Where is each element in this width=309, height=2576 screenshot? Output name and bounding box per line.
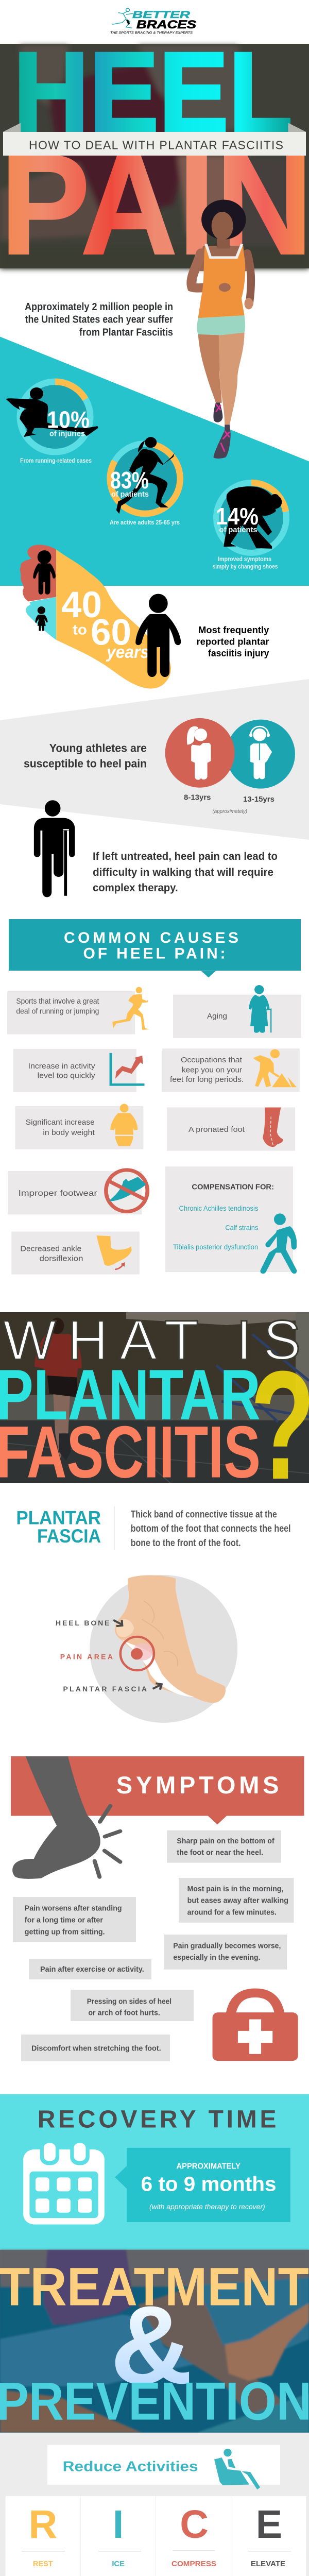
hero photo background: [0, 44, 309, 269]
panel: hero heel pain: [0, 29, 309, 284]
cause: body weight: [15, 1104, 143, 1149]
cause: pronated foot: [167, 1107, 295, 1151]
text: if left untreated: complex therapy.: [93, 882, 178, 894]
logo: Better Braces top: [110, 8, 196, 35]
heading: common causes banner: OF HEEL PAIN:: [83, 945, 226, 962]
panel: plantar fascia definition: [16, 1506, 290, 1550]
callout: 6 to 9 months: [115, 2148, 290, 2222]
panel: what is plantar fasciitis: [0, 1309, 309, 1512]
symptom: worsens after standing: Pain worsens after standing: [25, 1904, 122, 1913]
stat: 14% of patients: of patients: [219, 526, 258, 534]
stat: 14% of patients: simply by changing shoes: [212, 563, 278, 570]
label: heel bone: HEEL BONE: [56, 1619, 109, 1627]
panel: causes grid: [7, 985, 301, 1275]
callout: 6 to 9 months: (with appropriate therapy to recover): [149, 2202, 265, 2211]
symptom: worsens after standing: for a long time or after: [25, 1916, 103, 1924]
panel: treatment and prevention: [0, 2250, 309, 2433]
age numbers: [61, 585, 149, 662]
label: pain area: PAIN AREA: [60, 1653, 113, 1661]
icon: adult figure: [135, 594, 181, 677]
ice: I: [113, 2502, 124, 2547]
cause: occupations: keep you on your: [182, 1065, 242, 1075]
symptom: gradually worse: [164, 1935, 287, 1970]
stat: 83% of patients: [102, 436, 188, 526]
intro text: 2 million people: the United States each year suffer: [25, 314, 173, 326]
icon: boy circle: [226, 720, 295, 789]
age numbers: 60: [91, 612, 131, 653]
cause: activity increase: Increase in activity: [28, 1062, 95, 1071]
symptom: after exercise: [29, 1959, 151, 1979]
stat: 14% of patients: 14%: [216, 503, 259, 530]
text: young athletes: susceptible to heel pain: [24, 757, 147, 770]
icon: first aid kit: [213, 1993, 298, 2061]
symptom: discomfort stretching: [21, 2035, 170, 2061]
heading: plantar fascia: FASCIA: [37, 1526, 101, 1547]
stat: 14% of patients: [212, 480, 289, 570]
intro text: 2 million people: [25, 301, 173, 338]
symptom: sharp pain: Sharp pain on the bottom of: [177, 1837, 275, 1845]
cause: activity increase: [13, 1049, 145, 1092]
heading: common causes banner: COMMON CAUSES: [64, 929, 238, 946]
cause: compensation: COMPENSATION FOR:: [192, 1183, 274, 1192]
stat: 10% of injuries: [6, 378, 98, 464]
age labels: 8-13yrs: [184, 793, 211, 802]
stat: 83% of patients: 83%: [110, 467, 149, 494]
logo: Better Braces top: BETTER: [132, 10, 190, 21]
caption: most frequently reported: reported plantar: [197, 637, 269, 647]
stat: 10% of injuries: of injuries: [49, 429, 85, 438]
age labels: (approximately): [212, 809, 247, 815]
symptom: worsens after standing: [13, 1897, 136, 1942]
icon: painful foot: [12, 1756, 120, 1879]
panel: recovery time: [0, 2094, 309, 2250]
cause: compensation: [165, 1166, 297, 1274]
cause: ankle dorsiflexion: [11, 1231, 140, 1275]
title: ampersand: &: [110, 2282, 193, 2407]
symptom: sharp pain: [167, 1831, 281, 1863]
symptom: pressing sides: [71, 1990, 194, 2021]
callout: 6 to 9 months: 6 to 9 months: [141, 2173, 276, 2195]
item: reduce activities: [47, 2445, 280, 2489]
symptom: morning pain: around for a few minutes.: [187, 1908, 277, 1917]
stat: 14% of patients: Improved symptoms: [218, 555, 271, 563]
item: reduce activities: Reduce Activities: [63, 2458, 198, 2474]
cause: compensation: Calf strains: [225, 1224, 258, 1232]
panel: young athletes: [0, 679, 309, 840]
stat: 10% of injuries: From running-related cases: [20, 457, 92, 464]
heading: plantar fascia: PLANTAR: [16, 1507, 101, 1529]
text: definition: Thick band of connective tissue at the: [131, 1509, 277, 1520]
cause: occupations: Occupations that: [181, 1056, 243, 1064]
cause: sports: Sports that involve a great: [16, 997, 99, 1006]
cause: aging: Aging: [207, 1012, 227, 1021]
cause: improper footwear: [8, 1170, 147, 1214]
title: what is: WHAT IS: [3, 1309, 301, 1371]
rest: [29, 2502, 57, 2568]
symptom: morning pain: [179, 1878, 294, 1923]
cause: improper footwear: Improper footwear: [19, 1189, 97, 1198]
logo: Better Braces top: THE SPORTS BRACING & THERAPY EXPERTS: [110, 31, 193, 35]
icon: foot with people: [20, 545, 171, 689]
subtitle ribbon: [3, 123, 306, 156]
cause: body weight: in body weight: [43, 1128, 95, 1137]
intro text: 2 million people: Approximately 2 million people in: [25, 301, 173, 313]
photo background: roller and leg: [0, 2250, 309, 2433]
symptom: discomfort stretching: Discomfort when stretching the foot.: [31, 2044, 161, 2053]
heading: plantar fascia: [16, 1507, 101, 1547]
icon: man with cane: [34, 800, 75, 897]
intro text: 2 million people: from Plantar Fasciitis: [79, 327, 173, 338]
runner woman photo illustration: [192, 200, 253, 459]
symptom: pressing sides: Pressing on sides of heel: [87, 1997, 171, 2006]
heading: common causes banner: [9, 919, 301, 977]
cause: sports: deal of running or jumping: [16, 1008, 99, 1016]
elevate: ELEVATE: [251, 2560, 285, 2568]
text: if left untreated: If left untreated, heel pain can lead to: [93, 851, 278, 862]
panel: treatment list background: [0, 2433, 309, 2576]
diagram: foot anatomy: [56, 1575, 237, 1723]
ice: [112, 2502, 125, 2568]
logo: Better Braces top: BRACES: [136, 18, 196, 31]
icon: calendar: [23, 2141, 105, 2225]
text: definition: [131, 1509, 290, 1549]
symptom: gradually worse: Pain gradually becomes worse,: [173, 1942, 281, 1951]
stat: 83% of patients: of patients: [111, 490, 149, 499]
rest: REST: [33, 2560, 53, 2568]
panel: untreated warning: [34, 800, 278, 897]
caption: most frequently reported: [197, 625, 269, 658]
panel: teal statistics background: [0, 337, 309, 586]
stat: 83% of patients: Are active adults 25-65 yrs: [110, 519, 180, 526]
callout: 6 to 9 months: APPROXIMATELY: [176, 2162, 241, 2171]
cause: ankle dorsiflexion: Decreased ankle: [20, 1245, 81, 1253]
cause: activity increase: level too quickly: [38, 1072, 95, 1080]
elevate: [251, 2502, 285, 2568]
elevate: E: [256, 2502, 282, 2547]
cause: aging: [173, 985, 301, 1038]
caption: most frequently reported: fasciitis injury: [208, 648, 269, 658]
cause: occupations: feet for long periods.: [170, 1075, 244, 1084]
text: if left untreated: difficulty in walking that will require: [93, 867, 273, 878]
text: young athletes: Young athletes are: [49, 742, 147, 754]
rest: R: [29, 2502, 57, 2547]
icon: girl circle: [165, 718, 234, 788]
symptom: pressing sides: or arch of foot hurts.: [88, 2009, 160, 2018]
age labels: [184, 793, 274, 815]
text: if left untreated: [93, 851, 278, 894]
symptom: morning pain: Most pain is in the morning,: [187, 1885, 283, 1893]
cause: sports: [7, 987, 149, 1035]
cause: body weight: Significant increase: [26, 1118, 95, 1127]
symptom: sharp pain: the foot or near the heel.: [177, 1849, 263, 1857]
subtitle ribbon: HOW TO DEAL WITH PLANTAR FASCIITIS: [29, 138, 283, 151]
heading: symptoms banner: SYMPTOMS: [116, 1771, 279, 1799]
cause: occupations: [162, 1048, 300, 1092]
age numbers: to: [73, 621, 87, 638]
age numbers: 40: [61, 585, 102, 625]
caption: most frequently reported: Most frequently: [198, 625, 269, 635]
symptom: worsens after standing: getting up from sitting.: [25, 1927, 105, 1936]
stat: 10% of injuries: 10%: [47, 406, 90, 433]
compress: [171, 2502, 216, 2568]
photo background: track and runner: [0, 1312, 309, 1483]
cause: ankle dorsiflexion: dorsiflexion: [39, 1255, 83, 1263]
symptom: after exercise: Pain after exercise or activity.: [40, 1965, 144, 1974]
age labels: 13-15yrs: [243, 795, 274, 804]
age numbers: years: [106, 642, 149, 662]
heading: symptoms banner: [11, 1756, 304, 1824]
compress: COMPRESS: [171, 2560, 216, 2568]
cause: compensation: Chronic Achilles tendinosis: [179, 1204, 258, 1212]
cause: compensation: Tibialis posterior dysfunction: [173, 1243, 258, 1251]
panel: RICE: [6, 2496, 306, 2576]
label: plantar fascia: PLANTAR FASCIA: [63, 1685, 147, 1693]
panel: symptom list: [13, 1831, 294, 2061]
symptom: morning pain: but eases away after walking: [187, 1896, 288, 1905]
heading: recovery time: RECOVERY TIME: [38, 2106, 276, 2133]
symptom: gradually worse: especially in the evening.: [173, 1953, 261, 1962]
text: young athletes: [24, 742, 147, 770]
ice: ICE: [112, 2560, 125, 2568]
text: definition: bone to the front of the foot.: [131, 1538, 241, 1549]
compress: C: [180, 2502, 209, 2547]
cause: pronated foot: A pronated foot: [188, 1125, 245, 1134]
illustration: foot: [115, 1575, 226, 1703]
panel: foot age graphic 40 to 60 years: [20, 545, 269, 689]
